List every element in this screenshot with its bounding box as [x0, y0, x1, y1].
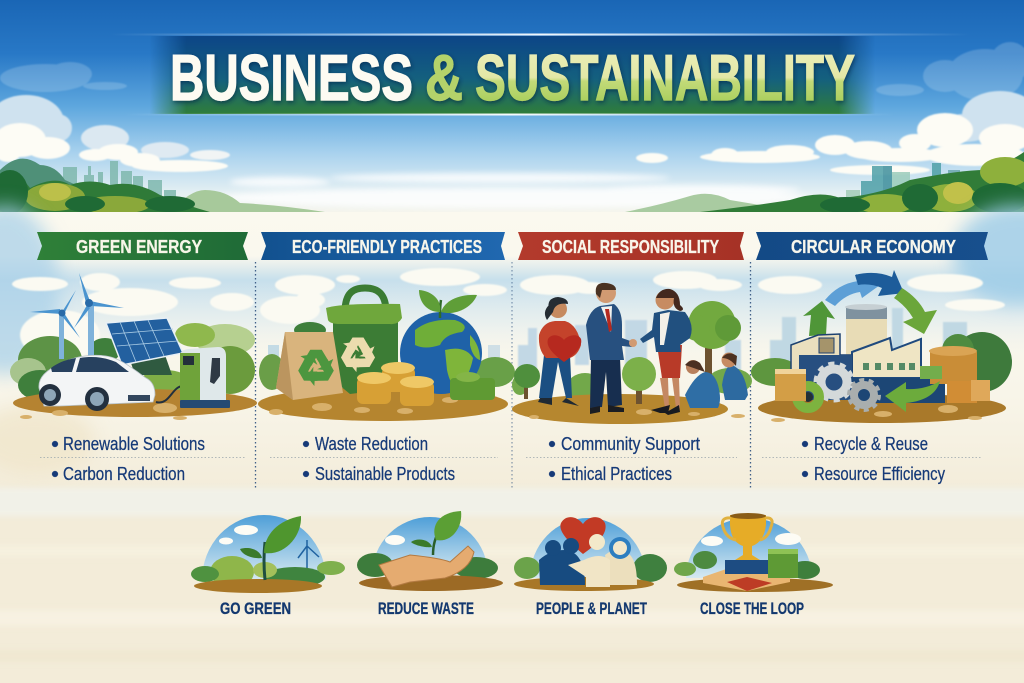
ground [194, 579, 322, 593]
illustration clouds and skyline [518, 271, 742, 375]
bullet list: circular economy: Resource Efficiency [814, 464, 945, 484]
banner: circular economy [756, 232, 988, 260]
icon: podium [703, 549, 798, 591]
badge: close the loop [674, 513, 833, 618]
banner: green energy [37, 232, 248, 260]
icon: charging station [156, 347, 230, 408]
title text: BUSINESS [170, 41, 413, 114]
icon: gears and recycling wheel [797, 364, 879, 410]
bushes [674, 551, 820, 579]
panel: green energy [10, 232, 257, 484]
clouds: right [636, 91, 1024, 175]
badge: people and planet [514, 517, 667, 618]
illustration clouds [260, 268, 507, 324]
ground [758, 393, 1006, 423]
icon: recycling bin [326, 288, 402, 394]
icon: solar panel [106, 318, 183, 375]
banner: green energy: GREEN ENERGY [76, 237, 202, 257]
ground [677, 578, 833, 592]
illustration: bushes and skyline [259, 322, 515, 390]
banner: circular economy: CIRCULAR ECONOMY [791, 237, 956, 257]
icon: trophy [722, 513, 772, 560]
icon: children planting [685, 352, 748, 408]
skyline: right [846, 163, 960, 211]
illustration clouds [12, 273, 254, 360]
clouds: left [0, 95, 230, 172]
ground [13, 389, 257, 420]
icon: businessman [586, 283, 633, 414]
background: sky [0, 0, 1024, 213]
title text [170, 41, 855, 114]
icon: green blocks [450, 372, 495, 400]
bullet list: circular economy [762, 434, 982, 484]
footer background [0, 488, 1024, 683]
faint upper clouds [0, 42, 1024, 101]
bullet list: eco-friendly practices: Sustainable Products [315, 464, 455, 484]
bullet list: green energy [40, 434, 245, 484]
icon: paper bag [276, 332, 343, 400]
icon: wind turbines [30, 273, 124, 359]
hills: right [625, 152, 1024, 214]
icon: cardboard boxes [775, 346, 990, 403]
illustration: bushes [512, 368, 752, 401]
icon: sprout [240, 516, 301, 580]
illustration: trees [10, 323, 255, 400]
bushes [514, 554, 667, 582]
hills [191, 556, 345, 588]
bullet list: green energy: Renewable Solutions [63, 434, 205, 454]
title text: SUSTAINABILITY [475, 41, 855, 114]
label: REDUCE WASTE [378, 599, 474, 618]
bullet list: eco-friendly practices: Waste Reduction [315, 434, 428, 454]
icon: trees [514, 301, 741, 404]
icon: open hand [379, 546, 474, 587]
illustration clouds and skyline [758, 274, 1005, 372]
icon: circular arrows [803, 270, 937, 336]
column dividers [256, 262, 750, 488]
horizon haze [212, 173, 812, 208]
badge: go green [191, 515, 345, 618]
bullet list: social responsibility: Ethical Practices [561, 464, 672, 484]
banner: eco-friendly practices [261, 232, 505, 260]
label: CLOSE THE LOOP [700, 599, 804, 618]
panel: circular economy [751, 232, 1012, 484]
icon: green arrow [885, 381, 940, 412]
skyline: left [63, 161, 176, 208]
banner: eco-friendly practices: ECO-FRIENDLY PRACTICES [292, 237, 482, 257]
icon: factory buildings [791, 334, 945, 403]
panel: social responsibility [512, 232, 752, 484]
main content background [0, 205, 1024, 495]
icon: turbine [298, 540, 319, 568]
bullet list: green energy: Carbon Reduction [63, 464, 185, 484]
bullet list: eco-friendly practices [270, 434, 498, 484]
icon: people group [539, 534, 637, 587]
ground [359, 575, 503, 591]
label: PEOPLE & PLANET [536, 599, 647, 618]
icon: woman holding heart [538, 297, 581, 406]
banner: social responsibility: SOCIAL RESPONSIBILITY [542, 237, 719, 257]
bullet list: social responsibility: Community Support [561, 434, 700, 454]
icon: globe with sprout [400, 290, 482, 394]
ground [512, 394, 745, 424]
bullet list: circular economy: Recycle & Reuse [814, 434, 928, 454]
icon: electric car [39, 355, 155, 411]
panel: eco-friendly practices [258, 232, 515, 484]
ground [514, 577, 654, 591]
bushes [357, 553, 498, 579]
badge: reduce waste [357, 511, 503, 618]
bullet list: social responsibility [526, 434, 737, 484]
title text: & [425, 41, 463, 114]
icon: businesswoman [629, 289, 692, 415]
illustration: trees [751, 332, 1012, 392]
label: GO GREEN [220, 599, 291, 618]
title band [110, 34, 970, 116]
icon: coin stacks [357, 362, 434, 406]
banner: social responsibility [518, 232, 744, 260]
hills: left [0, 159, 325, 214]
icon: factory tower [845, 304, 887, 357]
icon: heart [560, 517, 606, 554]
icon: sprout [411, 511, 461, 555]
ground [258, 387, 508, 421]
